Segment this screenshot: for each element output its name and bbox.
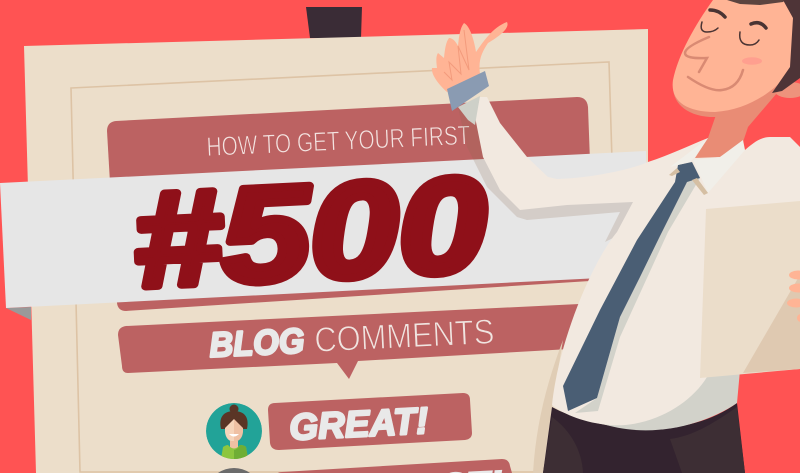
neck — [695, 93, 777, 158]
document held by man — [700, 201, 800, 378]
hair — [727, 0, 800, 93]
avatar: second commenter — [218, 468, 250, 473]
man character — [432, 0, 800, 473]
banner shadow fold — [6, 307, 31, 320]
text: how to get your first: HOW TO GET YOUR FIRST — [206, 120, 471, 162]
arm shadow — [458, 100, 640, 242]
body side shadow on board — [533, 340, 563, 473]
face details — [685, 10, 766, 90]
panel: headline background — [107, 97, 594, 311]
tie shadow — [575, 178, 700, 413]
clipboard clip — [306, 7, 362, 38]
panel: clipboard paper — [24, 29, 648, 473]
trousers — [543, 403, 745, 473]
text: #500: #500 — [129, 148, 490, 316]
shirt body and arm — [475, 97, 800, 425]
text: comments: COMMENTS — [313, 312, 495, 360]
shirt collar — [669, 138, 745, 195]
text: great: GREAT! — [288, 400, 429, 448]
hand — [432, 22, 508, 92]
cuff shadow — [458, 96, 480, 125]
panel: blog comments speech bubble — [118, 303, 600, 379]
shirt cuff — [447, 71, 489, 111]
text: blog: BLOG — [208, 321, 305, 365]
ear — [774, 82, 800, 98]
head shadow — [673, 60, 785, 117]
shirt bottom shadow — [600, 370, 740, 430]
head — [673, 0, 800, 112]
cheek blush — [742, 57, 762, 65]
comment bubble: second — [275, 459, 512, 473]
avatar: woman — [206, 403, 262, 459]
comment bubble: great — [268, 393, 472, 450]
banner — [0, 151, 648, 308]
necktie — [563, 162, 700, 411]
